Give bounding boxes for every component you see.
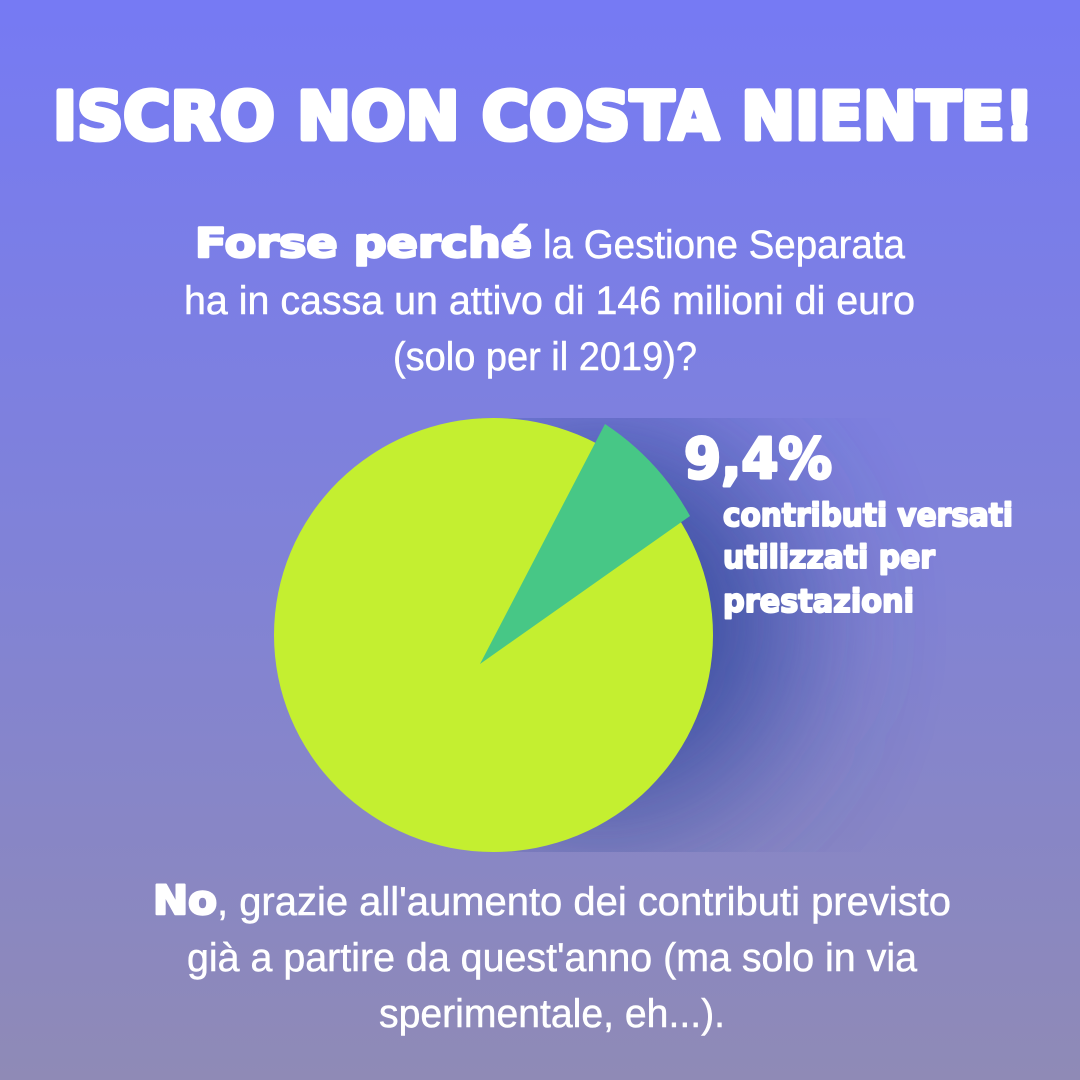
intro text block: ha in cassa un attivo di 146 milioni di euro [184, 279, 915, 323]
conclusion text block: sperimentale, eh...). [379, 992, 725, 1036]
chart shadow [410, 435, 790, 815]
callout: 9.4 percent: utilizzati per [723, 538, 935, 576]
title: ISCRO NON COSTA NIENTE! [53, 78, 1034, 155]
main slice 90.6% [274, 418, 713, 852]
callout: 9.4 percent: 9,4% [684, 427, 832, 492]
conclusion text block: già a partire da quest'anno (ma solo in via [187, 936, 918, 980]
intro text block: la Gestione Separata [543, 223, 906, 267]
intro text block: Forse perché [195, 221, 532, 267]
callout: 9.4 percent: contributi versati [723, 496, 1013, 534]
intro text block [184, 221, 915, 379]
callout: 9.4 percent [684, 427, 1013, 620]
conclusion text block: , grazie all'aumento dei contributi previsto [217, 880, 951, 924]
conclusion text block: No [153, 878, 217, 924]
pie chart [274, 418, 713, 852]
intro text block: (solo per il 2019)? [393, 335, 697, 379]
conclusion text block [153, 878, 951, 1036]
callout: 9.4 percent: prestazioni [723, 582, 914, 620]
highlighted slice 9.4% [480, 424, 690, 664]
